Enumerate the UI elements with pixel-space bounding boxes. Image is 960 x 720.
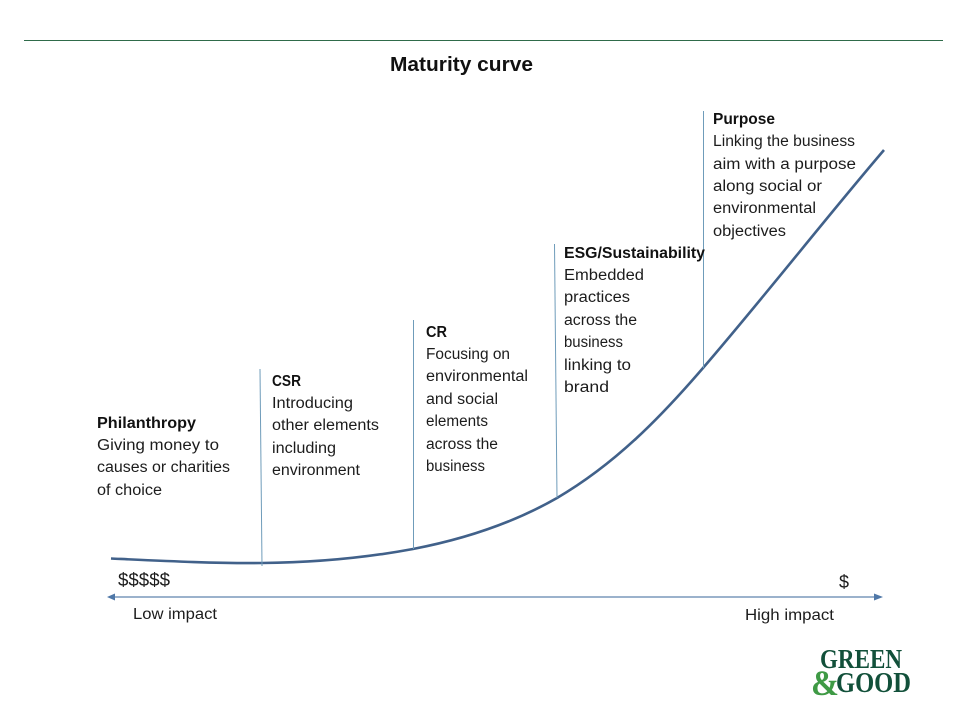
stage: Philanthropy: Giving money to: [97, 437, 219, 454]
stage: CR: elements: [426, 413, 488, 430]
stage: Purpose: environmental: [713, 200, 816, 217]
cost label: low: $: [839, 572, 849, 592]
stage: Philanthropy: of choice: [97, 482, 162, 499]
logo: Green & Good: &: [811, 663, 839, 703]
stage: ESG/Sustainability: ESG/Sustainability: [564, 245, 705, 262]
title: Maturity curve: [390, 54, 533, 76]
stage: Philanthropy: causes or charities: [97, 459, 230, 476]
stage: CR: and social: [426, 391, 498, 408]
stage: CR: Focusing on: [426, 346, 510, 363]
stage: Philanthropy: [97, 415, 230, 499]
stage: CR: [426, 324, 528, 475]
stage: Purpose: Purpose: [713, 111, 775, 128]
stage: CSR: CSR: [272, 373, 301, 390]
stage: CR: business: [426, 458, 485, 475]
stage: ESG/Sustainability: brand: [564, 379, 609, 396]
stage: CSR: environment: [272, 462, 361, 479]
impact axis arrow: [107, 594, 883, 600]
stage: Purpose: aim with a purpose: [713, 156, 856, 173]
stage: CSR: Introducing: [272, 395, 353, 412]
stage: CR: across the: [426, 436, 498, 453]
stage: ESG/Sustainability: across the: [564, 312, 637, 329]
logo: Green & Good: [811, 644, 911, 703]
stage: Purpose: [713, 111, 856, 240]
stage: CSR: [272, 373, 379, 479]
stage: Philanthropy: Philanthropy: [97, 415, 196, 432]
stage: Purpose: Linking the business: [713, 133, 855, 150]
logo: Green & Good: GREEN: [820, 644, 902, 674]
cost label: high: $$$$$: [118, 570, 170, 590]
stage: ESG/Sustainability: linking to: [564, 357, 631, 374]
maturity curve line: [111, 150, 884, 563]
stage: CR: environmental: [426, 368, 528, 385]
stage: ESG/Sustainability: Embedded: [564, 267, 644, 284]
stage: ESG/Sustainability: practices: [564, 289, 630, 306]
axis label: high impact: High impact: [745, 607, 835, 624]
stage: Purpose: objectives: [713, 223, 786, 240]
logo: Green & Good: GOOD: [836, 667, 911, 699]
stage: CSR: other elements: [272, 417, 379, 434]
stage: ESG/Sustainability: [564, 245, 705, 396]
stage: CSR: including: [272, 440, 336, 457]
axis label: low impact: Low impact: [133, 606, 218, 623]
stage: CR: CR: [426, 324, 447, 341]
stage marker lines: [260, 111, 704, 566]
stage: Purpose: along social or: [713, 178, 822, 195]
stage: ESG/Sustainability: business: [564, 334, 623, 351]
